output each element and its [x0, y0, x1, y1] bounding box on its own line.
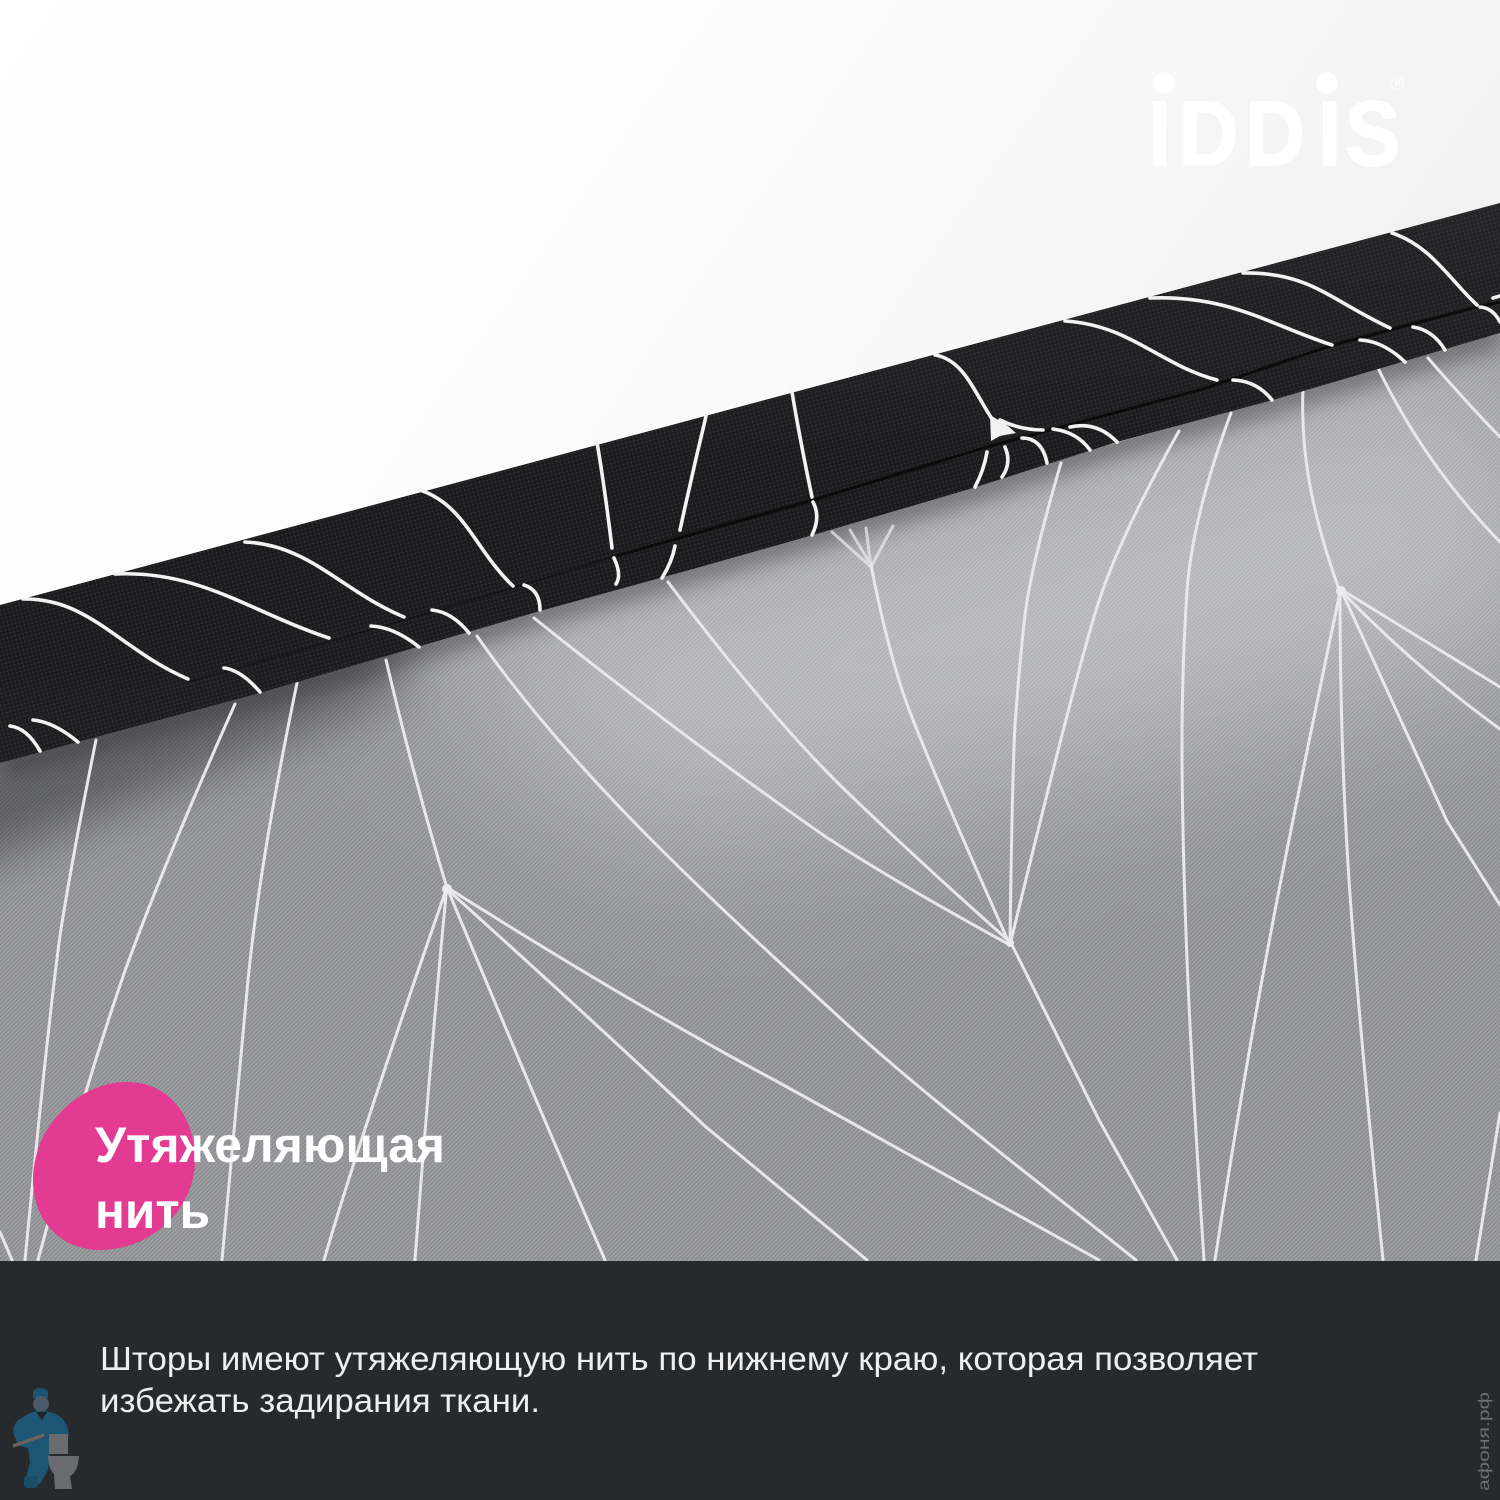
- heading: weighted thread: Утяжеляющая: [95, 1117, 445, 1173]
- panel: dark caption bar: [0, 1261, 1500, 1500]
- curtain geometric line pattern: [0, 358, 1500, 1260]
- text block: caption: [100, 1340, 1258, 1419]
- white pattern lines on hem: [10, 233, 1500, 751]
- icon: plumber with toilet: [13, 1388, 79, 1489]
- logo: iddis: ®: [1391, 74, 1404, 94]
- callout blob: pink circle: [33, 1082, 195, 1250]
- hem stitch line: [188, 556, 616, 682]
- text block: caption: избежать задирания ткани.: [100, 1382, 540, 1419]
- panel: grey curtain fabric: [0, 320, 1500, 1261]
- panel: black weighted hem band: [0, 203, 1500, 763]
- watermark: site name: афоня.рф: [1476, 1392, 1493, 1491]
- logo: iddis: IDDIS: [1148, 82, 1400, 185]
- heading: weighted thread: нить: [95, 1183, 210, 1239]
- text block: caption: Шторы имеют утяжеляющую нить по нижнему краю, которая позволяет: [100, 1340, 1258, 1377]
- heading: weighted thread: [95, 1117, 445, 1239]
